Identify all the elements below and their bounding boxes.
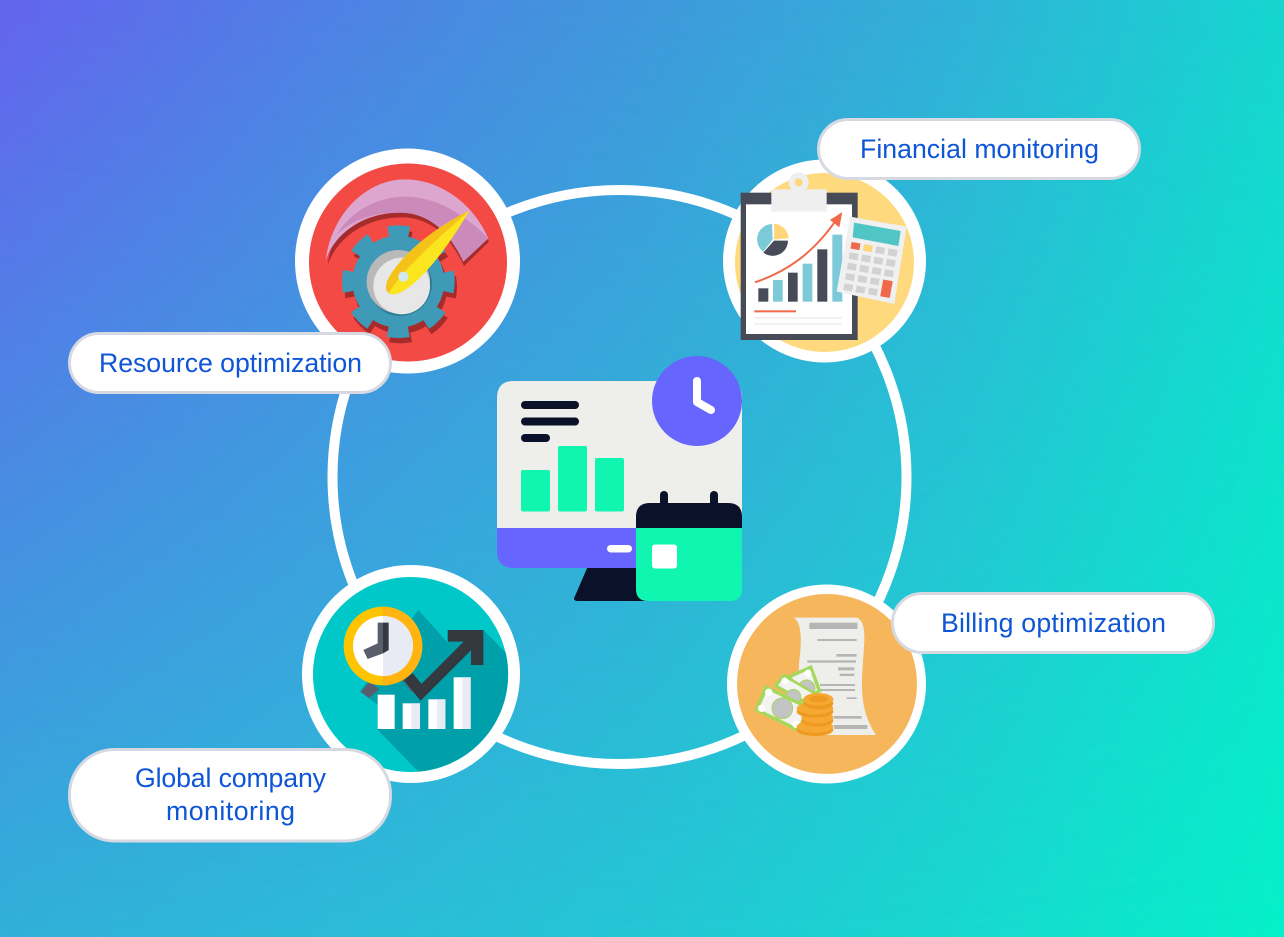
icon: billing receipt and money: [727, 584, 926, 784]
label: Global company monitoring: [70, 750, 390, 841]
gear shadow: [351, 237, 451, 337]
gauge arc: [326, 179, 488, 262]
receipt: [793, 618, 876, 735]
banknotes: [754, 665, 822, 733]
monitor base band: [497, 528, 742, 568]
calculator: [837, 217, 907, 304]
text lines: [521, 401, 579, 442]
coin stack: [797, 693, 833, 736]
pie chart: [757, 224, 789, 256]
label: Global company monitoring: monitoring: [166, 796, 295, 826]
label: Financial monitoring: Financial monitoring: [860, 134, 1099, 164]
gear: [348, 232, 448, 332]
gauge arc shadow: [328, 184, 489, 266]
clipboard: [741, 193, 858, 340]
label: Billing optimization: Billing optimization: [941, 608, 1166, 638]
clock: [344, 607, 422, 685]
icon: resource gauge: [295, 148, 520, 374]
central icon: monitor dashboard with clock and calendar: [497, 356, 742, 601]
label: Resource optimization: [70, 334, 390, 392]
long shadow: [360, 610, 515, 777]
monitor screen: [497, 381, 742, 528]
icon: financial clipboard: [723, 160, 926, 362]
magnifier handle: [361, 682, 379, 698]
label: Global company monitoring: Global company: [135, 763, 327, 793]
rising arrow: [408, 630, 483, 692]
bar chart: [758, 235, 842, 302]
bar chart: [521, 446, 624, 512]
bar chart: [378, 677, 471, 729]
monitor stand: [574, 566, 660, 601]
label: Billing optimization: [892, 594, 1214, 652]
icon: clock: [652, 356, 742, 446]
label: Resource optimization: Resource optimization: [99, 348, 362, 378]
icon: global monitoring: [302, 565, 520, 783]
label: Financial monitoring: [818, 120, 1140, 178]
needle: [386, 211, 469, 294]
icon: calendar: [636, 491, 742, 601]
rising arrow: [755, 212, 842, 282]
connecting ring: [332, 190, 906, 764]
